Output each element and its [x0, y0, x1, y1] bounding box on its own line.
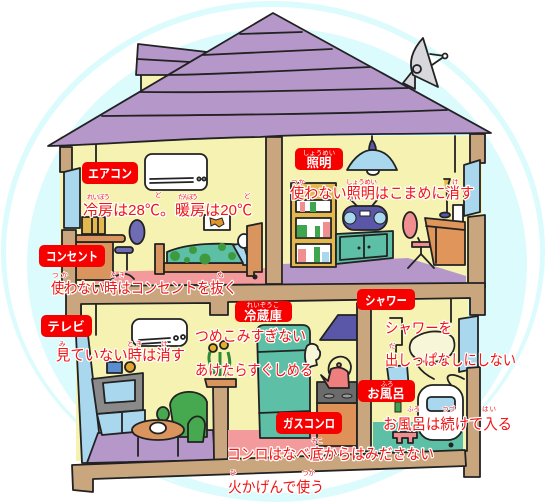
- tip: bath: つづ: [442, 404, 456, 413]
- tip: bath: はい: [482, 405, 496, 413]
- panel: lower left room (television): [76, 319, 236, 463]
- panel: upper left room (air conditioner, outlet): [60, 147, 268, 288]
- bed: [155, 223, 262, 280]
- floor: [373, 422, 463, 455]
- floor: [95, 268, 268, 284]
- tip: lighting: け: [452, 178, 458, 186]
- label: outlet: [39, 245, 105, 267]
- house interior walls: [60, 136, 482, 461]
- cabinet: [336, 231, 393, 264]
- panel: bathroom: [373, 316, 480, 477]
- tip: gas stove flame: 火かげんで使う: [228, 479, 324, 496]
- tip: lighting: [290, 178, 474, 202]
- right pillar: [464, 367, 480, 477]
- tip: air conditioner temperature: 冷房は28℃。暖房は20℃: [83, 202, 252, 219]
- tip: refrigerator: あけたらすぐしめる: [195, 362, 313, 379]
- window: [64, 168, 80, 228]
- label: bath: [358, 380, 415, 402]
- window: [76, 335, 99, 463]
- bookshelf: [291, 183, 336, 267]
- label: bath: ふろ: [380, 380, 394, 388]
- desk: [62, 217, 125, 288]
- tip: shower: だ: [389, 342, 396, 350]
- tip: air conditioner temperature: ど: [155, 191, 162, 199]
- tip: bath: [383, 404, 512, 433]
- label: shower: シャワー: [365, 294, 407, 308]
- floor: [87, 430, 215, 463]
- tip: television: [56, 340, 185, 364]
- tip: gas stove pot: [227, 437, 434, 463]
- shower pipe and water: [387, 318, 409, 412]
- tip: air conditioner temperature: れいぼう: [87, 193, 110, 201]
- tip: outlet: とき: [110, 271, 125, 279]
- television: [92, 362, 145, 435]
- label: refrigerator: [235, 301, 292, 323]
- tip: outlet: ぬ: [217, 271, 224, 279]
- armchair: [157, 392, 207, 442]
- tip: television: 見ていない時は消す: [56, 347, 185, 364]
- tip: outlet: 使わない時はコンセントを抜く: [51, 280, 237, 297]
- label: lighting: しょうめい: [303, 149, 335, 157]
- range hood: [320, 315, 357, 340]
- chair: [403, 212, 434, 268]
- label: gas stove: [276, 412, 342, 434]
- panel: upper right room (lighting): [283, 134, 485, 288]
- tip: bath: ふろ: [407, 405, 420, 413]
- tip: gas stove flame: つか: [302, 469, 316, 477]
- stool: [393, 432, 417, 443]
- kettle: [321, 357, 351, 388]
- label: gas stove: ガスコンロ: [283, 416, 335, 431]
- table: [132, 420, 184, 456]
- dormer: [136, 44, 207, 92]
- label: bath: お風呂: [367, 387, 405, 401]
- label: air conditioner: [82, 162, 138, 184]
- tip: air conditioner temperature: だんぼう: [178, 193, 198, 201]
- tip: refrigerator: [195, 328, 313, 379]
- tip: shower: [385, 320, 516, 369]
- label: refrigerator: 冷蔵庫: [244, 308, 282, 323]
- tip: television: とき: [127, 340, 142, 348]
- radio: [343, 199, 387, 230]
- tip: shower: 出しっぱなしにしない: [385, 352, 516, 369]
- tip: gas stove pot: そこ: [311, 437, 323, 445]
- tip: air conditioner temperature: ど: [244, 192, 251, 200]
- air conditioner: [132, 319, 187, 346]
- label: television: [41, 315, 92, 337]
- tip: gas stove flame: ひ: [230, 469, 237, 477]
- tip: outlet: [51, 271, 237, 297]
- label: television: テレビ: [47, 319, 85, 334]
- floor divider: [66, 283, 485, 335]
- tip: gas stove flame: [228, 469, 324, 496]
- steam: [305, 344, 320, 367]
- label: refrigerator: れいぞうこ: [247, 301, 279, 309]
- satellite dish: [403, 38, 448, 89]
- wall pillar left: [60, 147, 72, 172]
- bathtub: [418, 375, 464, 448]
- label: outlet: コンセント: [46, 250, 98, 264]
- center wall upper: [266, 137, 282, 284]
- tip: lighting: 使わない照明はこまめに消す: [290, 185, 474, 202]
- center wall lower: [357, 303, 371, 452]
- tip: gas stove pot: コンロはなべ底からはみださない: [227, 446, 434, 463]
- air conditioner: [145, 154, 207, 190]
- foundation: [72, 450, 466, 492]
- refrigerator: [257, 325, 310, 438]
- tip: bath: お風呂は続けて入る: [383, 416, 512, 433]
- tip: television: み: [59, 340, 66, 348]
- stove counter: [317, 382, 357, 446]
- floor: [283, 258, 466, 284]
- label: lighting: 照明: [306, 156, 332, 170]
- tip: television: け: [161, 340, 168, 348]
- tip: shower: シャワーを: [385, 320, 452, 337]
- tip: outlet: つか: [52, 271, 68, 279]
- tip: lighting: しょうめい: [346, 178, 377, 186]
- desk with lamp: [425, 179, 465, 265]
- tip: refrigerator: つめこみすぎない: [195, 328, 306, 345]
- bather silhouette: [410, 331, 454, 379]
- label: lighting: [295, 148, 343, 170]
- right window: [459, 316, 478, 372]
- roof: [48, 13, 491, 146]
- floor: [228, 430, 357, 456]
- flower pot on pillar: [205, 341, 236, 460]
- label: shower: [357, 289, 415, 310]
- label: air conditioner: エアコン: [88, 167, 132, 181]
- chair: [112, 220, 144, 279]
- picture frame: [204, 215, 230, 230]
- panel: kitchen: [228, 315, 357, 456]
- tip: lighting: つか: [291, 178, 306, 186]
- tip: air conditioner temperature: [83, 191, 252, 219]
- right pillar and window: [464, 134, 485, 288]
- pendant lamp: [347, 136, 397, 175]
